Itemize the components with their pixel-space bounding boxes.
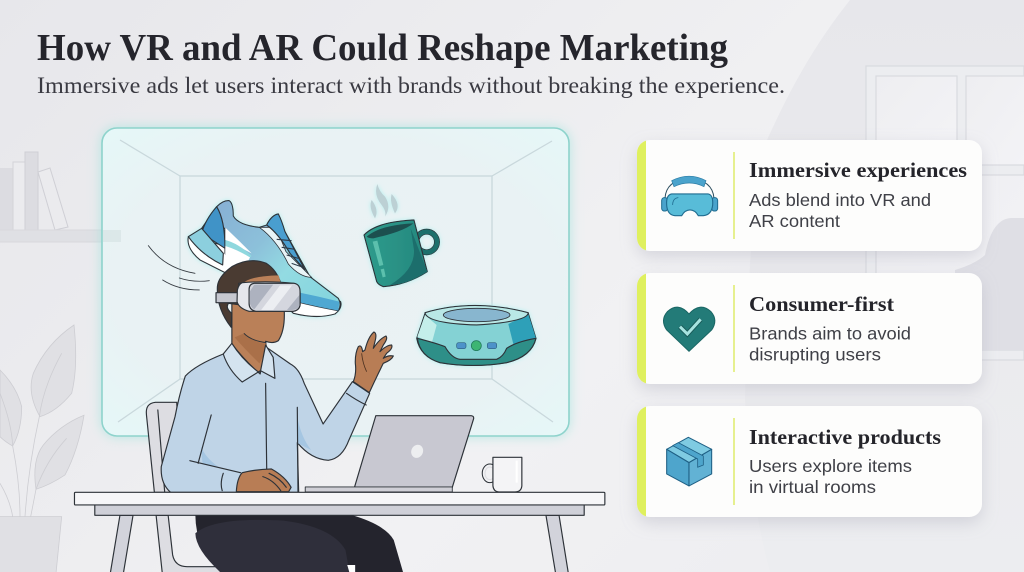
desk	[74, 492, 605, 515]
bookshelf	[0, 152, 120, 242]
window in background	[866, 66, 1024, 360]
steam	[371, 184, 398, 218]
card 2 description: disrupting users	[749, 344, 881, 364]
forehead	[242, 275, 281, 284]
neck and face	[232, 300, 284, 374]
motion lines	[148, 246, 209, 290]
laptop	[305, 416, 474, 492]
shirt collar	[223, 343, 275, 382]
card 3 heading: Interactive products	[749, 425, 941, 449]
card: consumer-first	[637, 273, 982, 384]
coffee mug hologram	[364, 184, 437, 287]
background plant	[0, 325, 84, 572]
chair	[146, 402, 294, 572]
card 2 heading: Consumer-first	[749, 292, 895, 316]
virtual room wireframe	[118, 140, 553, 422]
desk legs	[110, 515, 568, 572]
smart speaker hologram	[417, 305, 536, 365]
icon: package box	[667, 437, 712, 486]
raised hand	[353, 332, 393, 393]
subtitle: Immersive ads let users interact with brands without breaking the experience.	[37, 73, 785, 99]
person	[161, 261, 403, 572]
hair	[217, 261, 281, 327]
shirt	[161, 345, 370, 492]
card 1 description: AR content	[749, 211, 840, 231]
holographic VR panel	[102, 128, 569, 436]
VR headset	[216, 282, 300, 311]
icon: VR headset	[662, 176, 718, 216]
title: How VR and AR Could Reshape Marketing	[37, 27, 728, 69]
card 1 heading: Immersive experiences	[749, 158, 967, 182]
card 1 description: Ads blend into VR and	[749, 190, 931, 210]
card: interactive products	[637, 406, 982, 517]
lower hand	[236, 469, 291, 492]
card 2 description: Brands aim to avoid	[749, 324, 911, 344]
card 3 description: in virtual rooms	[749, 477, 876, 497]
trousers	[195, 515, 403, 572]
white cup on desk	[482, 457, 522, 492]
card 3 description: Users explore items	[749, 456, 912, 476]
shoe hologram	[188, 201, 341, 316]
card: immersive experiences	[637, 140, 982, 251]
icon: heart with check	[663, 307, 715, 351]
background silhouette	[955, 218, 1024, 350]
